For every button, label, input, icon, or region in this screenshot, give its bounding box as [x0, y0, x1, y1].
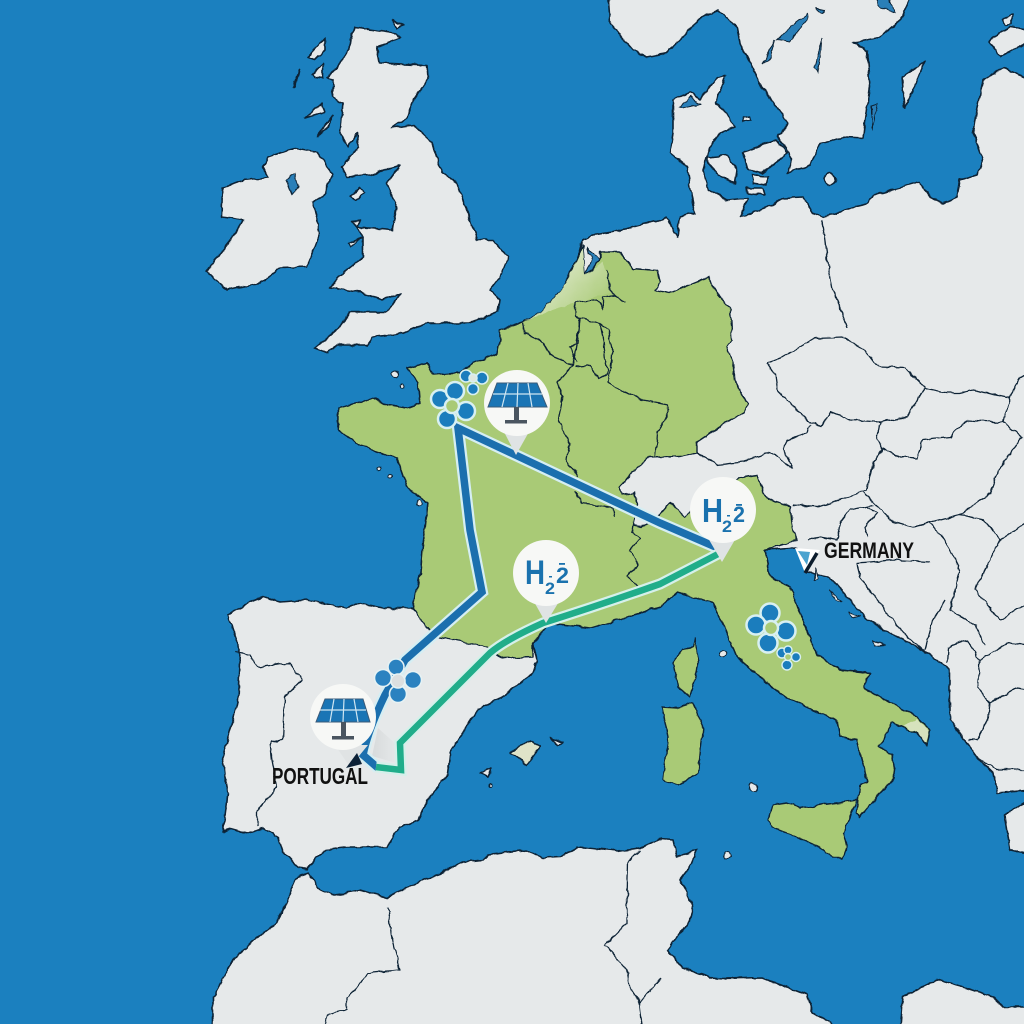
pipeline: blue hydrogen route [363, 428, 718, 768]
land: tiny islets [377, 370, 885, 858]
land: British small islands [293, 20, 403, 247]
H2 label: 2 [733, 502, 745, 527]
H2 label: 2 [556, 563, 569, 588]
H2 label [702, 492, 745, 536]
marker: solar pin Spain [310, 684, 376, 768]
icon: small molecule Normandy [460, 370, 488, 394]
country borders [236, 220, 1024, 1024]
icon: hydrogen molecule Italy [746, 604, 796, 652]
marker: H2 pin southern France [513, 540, 579, 623]
inland lakes and fjords [286, 0, 895, 275]
land: Libya coast [900, 980, 1024, 1024]
marker: H2 pin northern Italy [690, 477, 756, 562]
land: grey countries [207, 0, 1024, 1024]
land: Ireland [207, 148, 332, 290]
land: Scandinavia [608, 0, 913, 173]
land: Finland and Baltic islands [902, 14, 1024, 108]
base map with rough coastlines [207, 0, 1024, 1024]
H2 label: 2 [722, 517, 732, 536]
H2 label [525, 554, 569, 598]
marker: solar pin France [484, 370, 550, 455]
icon: solar panel [316, 699, 370, 740]
H2 label: H [525, 554, 545, 592]
land: main continent [222, 68, 1024, 870]
icon: hydrogen molecule Brittany [431, 382, 475, 428]
paler green shading on the Italian heel [903, 719, 929, 743]
H2 label: H [702, 492, 723, 529]
land: Danish islands [708, 116, 787, 195]
label: PORTUGAL: PORTUGAL [272, 763, 368, 789]
label: GERMANY: GERMANY [824, 538, 914, 563]
grey wedge between the two routes in Spain [372, 728, 398, 763]
icon: small molecule Italy [777, 646, 800, 670]
green islands: Corsica, Sardinia, Sicily, Mallorca [510, 638, 857, 858]
land: North Africa [213, 839, 847, 1024]
land: Peloponnese [1005, 797, 1024, 855]
marker: triangle beside Germany label [795, 548, 820, 573]
land: Great Britain [315, 27, 508, 353]
paler green shading on the Low Countries coast [525, 247, 612, 321]
green highlighted region: France, Benelux, Germany, Italy [338, 245, 930, 817]
icon: hydrogen molecule Spain [374, 659, 422, 702]
icon: solar panel [488, 383, 547, 424]
pipeline: green hydrogen route [376, 553, 720, 770]
H2 label: 2 [545, 579, 555, 598]
land: Balearic islands [480, 738, 563, 777]
